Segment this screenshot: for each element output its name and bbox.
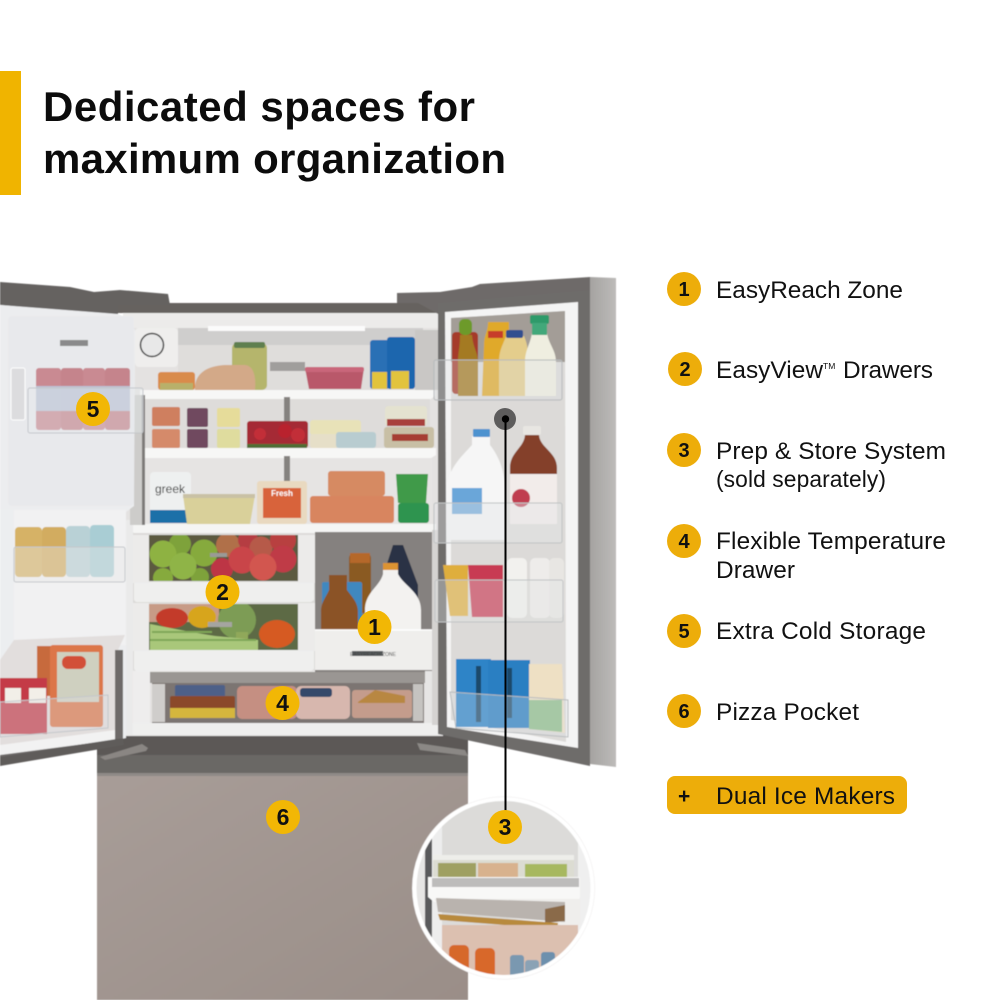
legend item 5: Extra Cold Storage <box>716 618 926 645</box>
EasyReach zone <box>315 532 435 672</box>
legend item 2: EasyView <box>716 357 823 384</box>
legend item 2: 2 <box>679 359 691 381</box>
milk jug <box>447 429 505 540</box>
callout line: prep and store <box>494 408 516 819</box>
juice bottle <box>510 426 557 524</box>
main shelf <box>130 524 436 534</box>
door bin: pouches <box>435 580 563 622</box>
dual ice makers pill <box>667 776 907 814</box>
freezer drawer <box>97 775 468 1000</box>
EasyReach zone: EASYREACH ZONE <box>350 652 397 658</box>
air control unit <box>135 328 178 367</box>
legend item 4: 4 <box>678 531 690 553</box>
legend item 6 <box>667 694 859 728</box>
legend item 2: Drawers <box>843 357 933 384</box>
door bin: lower <box>0 695 108 737</box>
right door <box>397 277 616 767</box>
shelf 2 <box>139 448 436 460</box>
title <box>43 83 506 182</box>
door bin: lower <box>450 692 568 737</box>
marker 4: 4 <box>276 690 289 716</box>
legend item 3: 3 <box>678 440 690 462</box>
lower shelf items: greek <box>155 482 186 496</box>
left door <box>0 282 170 766</box>
flexible temperature drawer <box>126 671 443 723</box>
legend item 2: TM <box>823 361 835 371</box>
title: Dedicated spaces for <box>43 83 475 130</box>
inset: prep and store system <box>412 797 596 980</box>
door bin: milk <box>434 503 562 543</box>
legend item 4 <box>667 524 946 584</box>
lower shelf tint <box>442 925 578 980</box>
door groceries <box>0 645 103 734</box>
marker 1 <box>358 610 392 644</box>
marker 4 <box>266 686 300 720</box>
lower drawer vegetables <box>149 601 298 650</box>
legend item 1 <box>667 272 903 306</box>
white shelf <box>428 877 580 902</box>
glass containers <box>432 860 443 877</box>
legend item 3: (sold separately) <box>716 466 886 492</box>
legend item 5: 5 <box>678 621 690 643</box>
shelf 1 <box>140 390 435 401</box>
dual ice makers pill: Dual Ice Makers <box>716 783 895 810</box>
marker 3 <box>488 810 522 844</box>
refrigerator photo <box>0 277 616 1000</box>
extra cold cans <box>36 368 130 430</box>
marker 2: 2 <box>216 579 229 605</box>
legend item 1: EasyReach Zone <box>716 277 903 304</box>
door cans <box>15 525 114 577</box>
legend item 3: Prep & Store System <box>716 438 946 465</box>
middle shelf items <box>152 406 434 448</box>
salsa boxes <box>456 659 565 733</box>
top frame <box>118 303 443 313</box>
upper drawer fruit <box>148 534 298 582</box>
door bin: middle <box>14 547 125 582</box>
legend item 3 <box>667 433 946 492</box>
legend item 1: 1 <box>678 279 690 301</box>
bottom sill <box>124 723 444 735</box>
marker 3: 3 <box>499 814 511 840</box>
marker 6: 6 <box>277 804 289 830</box>
lower shelf items <box>150 471 429 524</box>
marker 5: 5 <box>87 396 100 422</box>
legend item 5 <box>667 614 926 648</box>
marker 6 <box>266 800 300 834</box>
dual ice makers pill: + <box>678 785 690 808</box>
legend item 6: 6 <box>678 701 690 723</box>
top shelf items <box>158 337 415 390</box>
title accent bar <box>0 71 21 195</box>
lower hinge band <box>97 733 468 776</box>
pouches and bottles <box>443 558 564 618</box>
legend <box>667 272 946 814</box>
fridge interior <box>118 303 444 736</box>
lower door compartment <box>0 635 125 755</box>
legend item 2 <box>668 352 933 386</box>
condiments <box>452 315 556 396</box>
marker 1: 1 <box>368 614 381 640</box>
door bin: condiments <box>434 360 562 400</box>
in-door handle <box>11 368 25 420</box>
lower shelf items: Fresh <box>271 489 293 498</box>
legend item 4: Flexible Temperature <box>716 528 946 555</box>
marker 2 <box>206 575 240 609</box>
title: maximum organization <box>43 135 506 182</box>
EasyView drawers <box>133 527 315 671</box>
lower drawer face <box>134 650 314 671</box>
marker 5 <box>76 392 110 426</box>
upper drawer face <box>134 582 314 602</box>
door bin: upper <box>28 388 143 433</box>
legend item 4: Drawer <box>716 557 795 584</box>
door liner <box>445 302 578 748</box>
legend item 6: Pizza Pocket <box>716 699 859 726</box>
